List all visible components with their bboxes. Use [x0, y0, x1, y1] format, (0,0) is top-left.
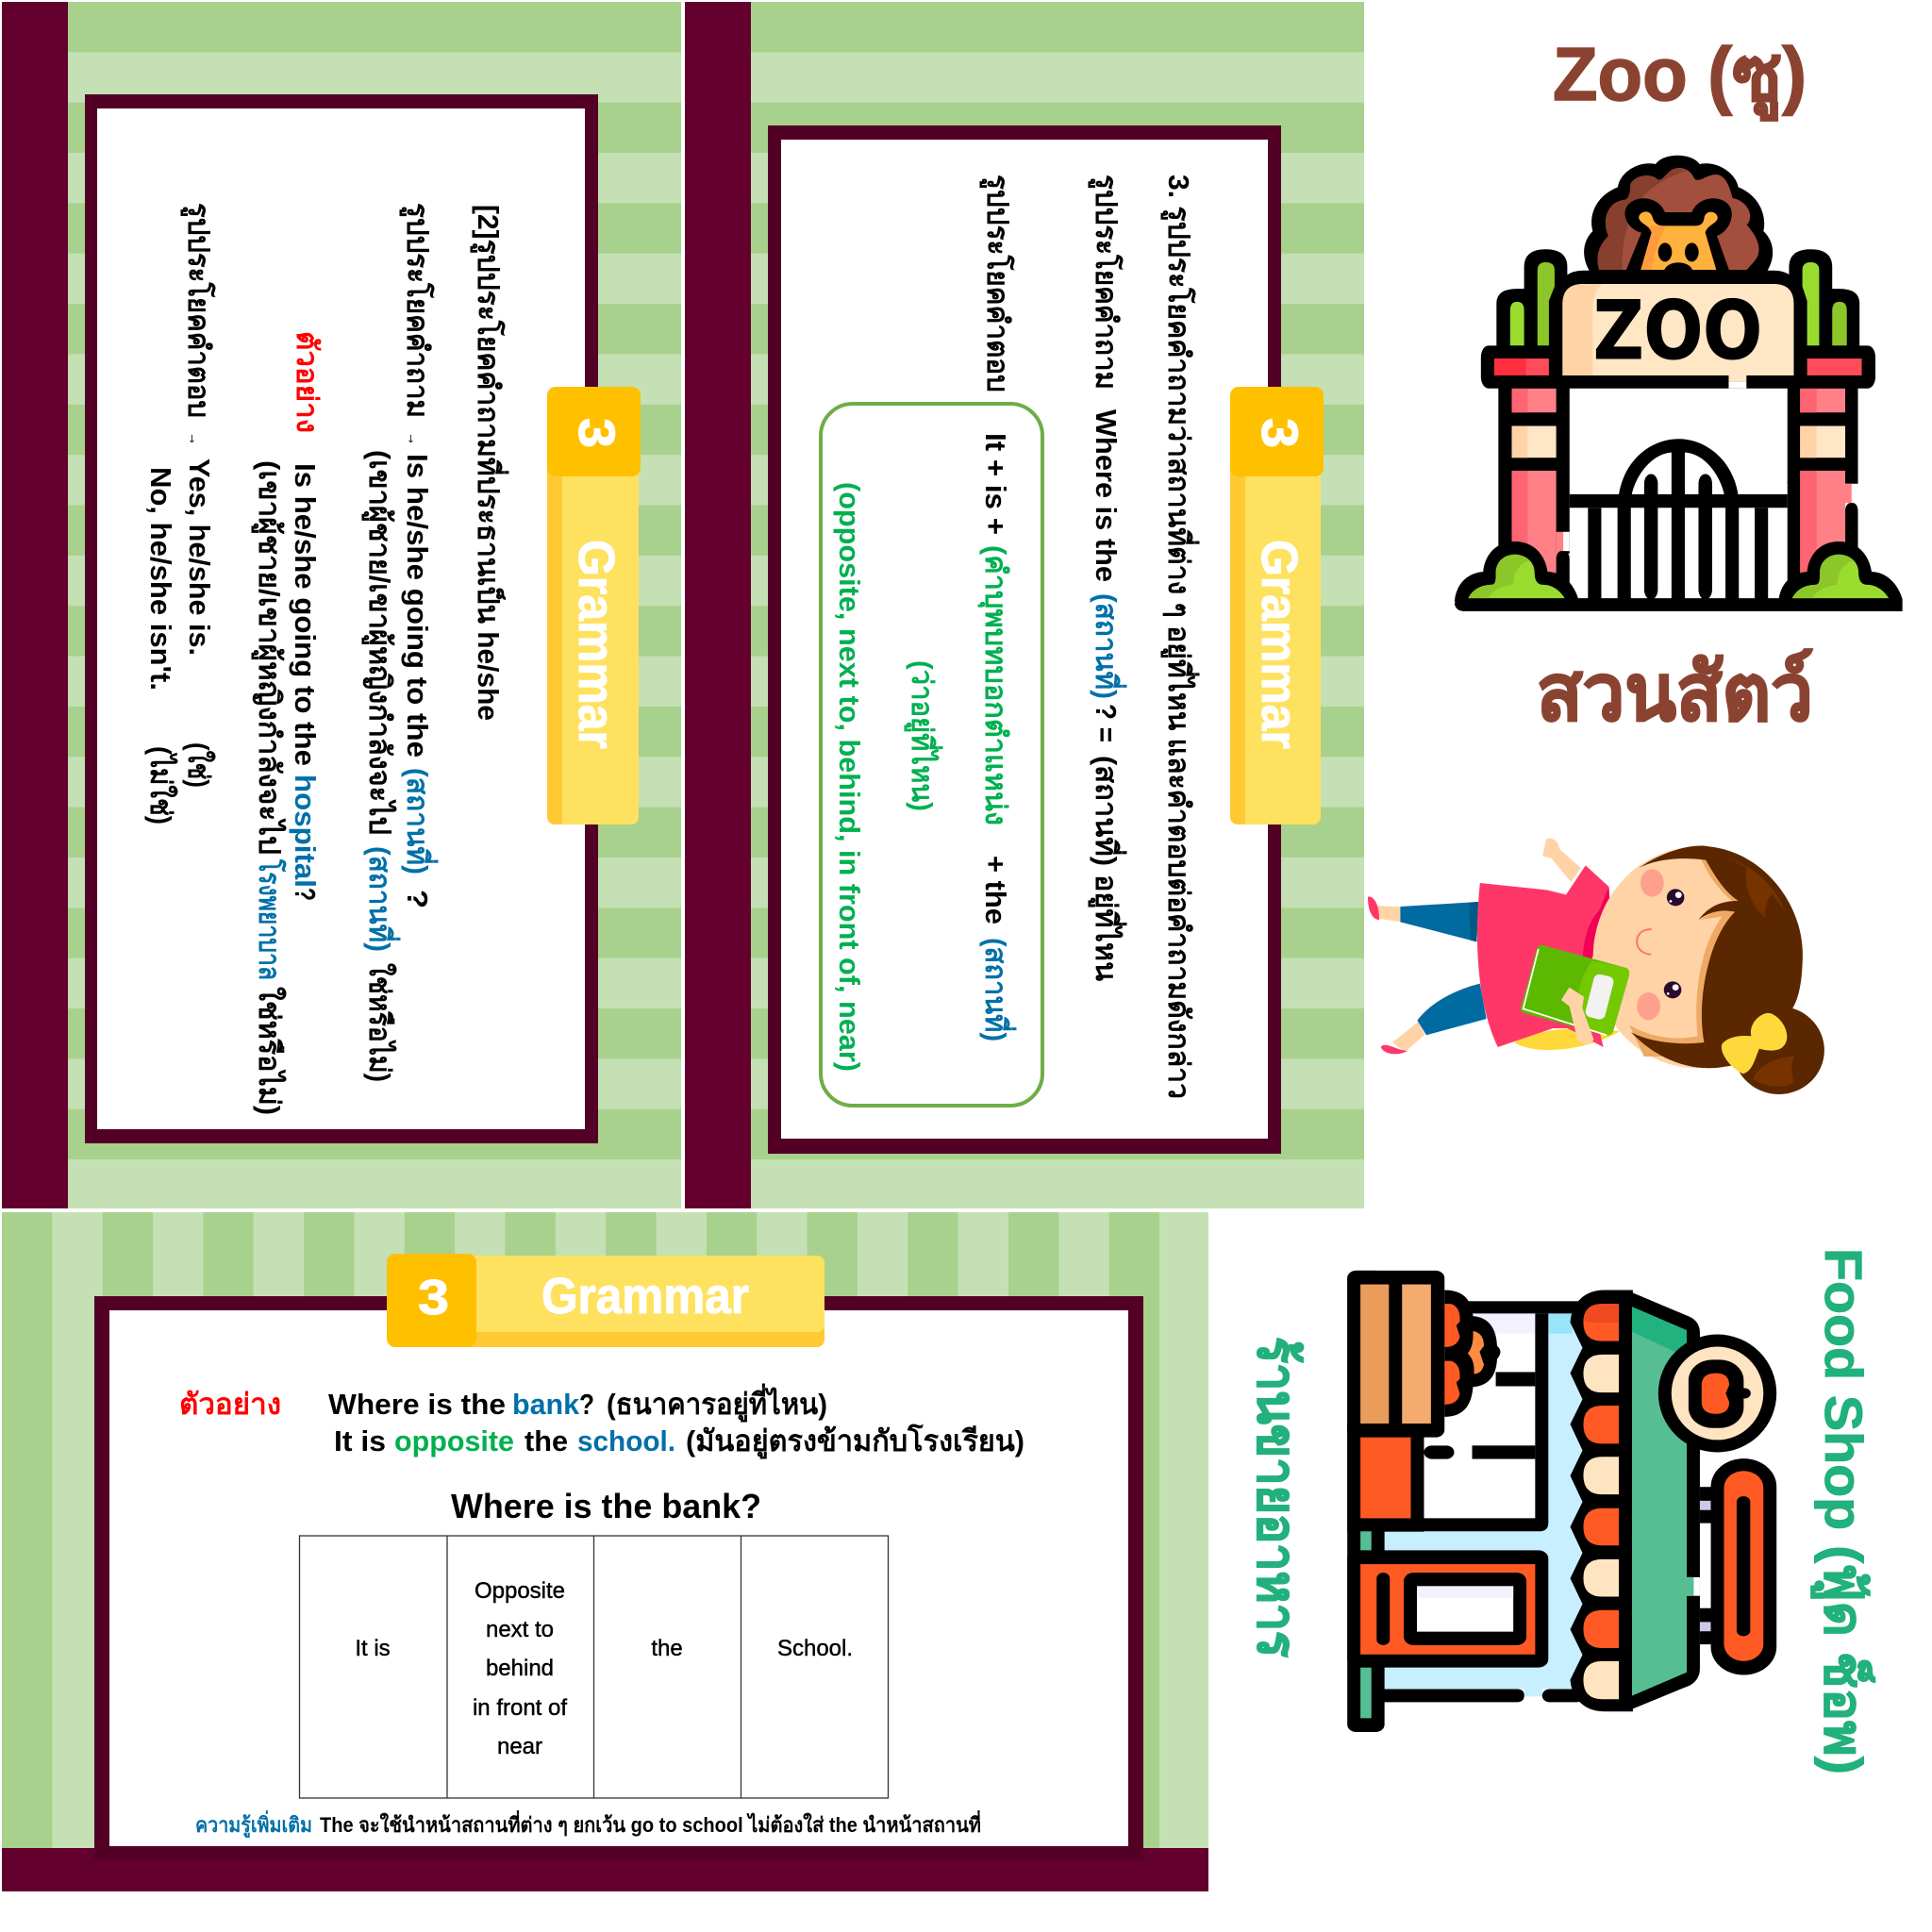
floor line: [1376, 1690, 1584, 1702]
sentence table: behind: [486, 1656, 554, 1681]
grammar badge: [387, 1254, 824, 1347]
example question: [289, 331, 324, 901]
zoo sign lettering: ZOO: [1593, 284, 1762, 378]
answer pattern: It + is +: [979, 433, 1012, 535]
hair highlight: [1728, 858, 1785, 918]
hair bow: [1722, 1013, 1787, 1074]
example answer: (มันอยู่ตรงข้ามกับโรงเรียน): [686, 1424, 1024, 1459]
panel: grammar slide 3 (where is): [685, 2, 1364, 1208]
example translation: โรงพยาบาล: [253, 858, 287, 980]
rounded highlight box: [821, 404, 1042, 1106]
icon: food shop: [1347, 1271, 1776, 1732]
question pattern: (สถานที่): [401, 768, 439, 874]
answer yes: Yes, he/she is.: [183, 458, 216, 656]
shop counter: [1347, 1271, 1444, 1732]
grammar badge: Grammar: [568, 540, 625, 749]
title: Zoo: Zoo (ซู): [1553, 32, 1807, 122]
slide card frame: [94, 1296, 1143, 1859]
title: Thai word for zoo: สวนสัตว์: [1537, 648, 1813, 737]
bush right: [1778, 541, 1903, 611]
answer pattern: (คำบุพบทบอกตำแหน่ง: [977, 545, 1012, 825]
answer yes: [180, 203, 216, 788]
grammar badge: [1230, 387, 1324, 824]
question pattern: อยู่ที่ไหน: [1088, 874, 1127, 981]
blush: [1637, 869, 1664, 1020]
question pattern: Where is the: [1090, 409, 1123, 582]
smile: [1637, 929, 1652, 955]
example answer: school.: [577, 1424, 675, 1457]
grammar badge: Grammar: [541, 1268, 749, 1324]
example question: [328, 1383, 827, 1423]
example question: bank: [512, 1388, 580, 1421]
preposition note: [833, 482, 943, 1072]
grammar badge: 3: [568, 418, 625, 448]
question pattern: [399, 203, 439, 908]
long sign: [1700, 1458, 1776, 1675]
example answer: opposite: [394, 1424, 514, 1457]
plants: [1496, 249, 1859, 351]
extra knowledge note: The จะใช้นำหน้าสถานที่ต่าง ๆ ยกเว้น go to school ไม่ต้องใส่ the นำหน้าสถานที่: [320, 1809, 981, 1837]
gate fence: [1570, 439, 1788, 599]
example question: ?: [289, 888, 322, 901]
head: [1593, 847, 1802, 1068]
answer yes: รูปประโยคคำตอบ: [180, 203, 216, 418]
sentence table: School.: [777, 1636, 853, 1661]
example answer: It is: [334, 1424, 386, 1457]
example question: (ธนาคารอยู่ที่ไหน): [607, 1383, 827, 1423]
answer no: [144, 467, 178, 824]
example translation: ใช่หรือไม่): [253, 987, 287, 1115]
table heading: Where is the bank?: [451, 1487, 761, 1525]
answer yes: (ใช่): [182, 742, 216, 788]
answer pattern: + the: [979, 856, 1012, 924]
answer pattern: [977, 175, 1017, 1041]
question pattern: ? =: [1090, 704, 1123, 742]
fruit display: [1444, 1290, 1500, 1417]
extra knowledge note: ความรู้เพิ่มเติม: [195, 1809, 312, 1839]
question translation: (สถานที่): [363, 846, 401, 952]
hand on book: [1561, 988, 1593, 1044]
lion: [1584, 156, 1773, 271]
question pattern: รูปประโยคคำถาม: [1088, 175, 1124, 390]
sentence table: It is: [355, 1636, 391, 1661]
title: Thai word for food shop: ร้านขายอาหาร: [1247, 1337, 1307, 1657]
question pattern: [1088, 175, 1127, 981]
grammar badge: 3: [418, 1271, 449, 1325]
example translation: [251, 460, 287, 1115]
question pattern: รูปประโยคคำถาม: [399, 203, 435, 418]
legs: [1368, 897, 1487, 1054]
hair shade: [1629, 852, 1757, 1057]
question pattern: (สถานที่): [1090, 756, 1127, 866]
sentence table: [300, 1536, 889, 1798]
question pattern: Is he/she going to the: [401, 454, 434, 758]
example question: ?: [579, 1388, 594, 1421]
preposition note: (opposite, next to, behind, in front of, near): [833, 482, 866, 1072]
dress: [1477, 865, 1609, 1047]
hair bun: [1733, 1007, 1824, 1094]
awning scallops: [1571, 1290, 1633, 1711]
arm raised: [1542, 839, 1581, 882]
window area: [1411, 1301, 1583, 1531]
sentence table: Opposite: [475, 1578, 565, 1604]
example answer: the: [525, 1424, 568, 1457]
ground line: [1455, 598, 1903, 611]
question translation: (เขาผู้ชาย/เขาผู้หญิงกำลังจะไป: [361, 450, 397, 835]
capitals: [1481, 345, 1875, 389]
answer no: No, he/she isn't.: [144, 467, 177, 691]
icon: zoo gate: [1455, 156, 1903, 611]
example question: ตัวอย่าง: [291, 331, 324, 433]
grammar badge: Grammar: [1251, 540, 1307, 749]
sentence table: the: [651, 1636, 683, 1661]
pillars: [1498, 385, 1857, 599]
example label: ตัวอย่าง: [179, 1388, 281, 1421]
round apple sign: [1658, 1335, 1776, 1452]
eyes: [1664, 889, 1684, 998]
question translation: ใช่หรือไม่): [363, 963, 397, 1082]
illustration: girl reading a book: [1368, 839, 1824, 1094]
heading: location question: 3. รูปประโยคคำถามว่าสถานที่ต่าง ๆ อยู่ที่ไหน และคำตอบต่อคำถามดังกล่าว: [1160, 175, 1200, 1099]
example translation: (เขาผู้ชาย/เขาผู้หญิงกำลังจะไป: [251, 460, 287, 855]
bush left: [1455, 541, 1578, 611]
panel: grammar slide example with table: [2, 1212, 1208, 1891]
yellow backpack: [1514, 890, 1620, 1050]
preposition note: (ว่าอยู่ที่ไหน): [904, 660, 943, 811]
sign board: [1557, 271, 1800, 389]
panel: grammar slide 2 (he/she questions): [2, 2, 681, 1208]
example question: Where is the: [328, 1388, 506, 1421]
sentence table: near: [497, 1734, 542, 1759]
slide card frame: [768, 125, 1281, 1154]
question pattern: ?: [401, 890, 434, 908]
grammar badge: [547, 387, 641, 824]
example question: Is he/she going to the: [289, 463, 322, 766]
grammar badge: 3: [1251, 418, 1307, 448]
slide card frame: [85, 94, 598, 1143]
extra knowledge note: [195, 1809, 981, 1839]
sentence table: next to: [486, 1617, 554, 1642]
question pattern: (สถานที่): [1090, 593, 1127, 699]
hair: [1631, 845, 1803, 1068]
answer yes: →: [184, 432, 205, 445]
title: Food Shop: Food Shop (ฟู้ด ช็อพ): [1810, 1248, 1876, 1774]
answer pattern: (สถานที่): [979, 938, 1017, 1041]
question translation: [361, 450, 401, 1082]
example question: hospital: [289, 774, 322, 888]
example answer: [334, 1424, 1024, 1459]
green roof: [1626, 1290, 1700, 1711]
wall: [1385, 1307, 1586, 1696]
book: [1521, 945, 1629, 1036]
answer no: (ไม่ใช่): [144, 746, 178, 824]
gate structure: [1455, 249, 1903, 611]
answer pattern: รูปประโยคคำตอบ: [979, 175, 1015, 392]
question pattern: →: [403, 432, 424, 445]
heading: question form with he/she: [2]รูปประโยคคำถามที่ประธานเป็น he/she: [470, 205, 509, 721]
sentence table: in front of: [473, 1695, 567, 1721]
door: [1347, 1550, 1548, 1668]
